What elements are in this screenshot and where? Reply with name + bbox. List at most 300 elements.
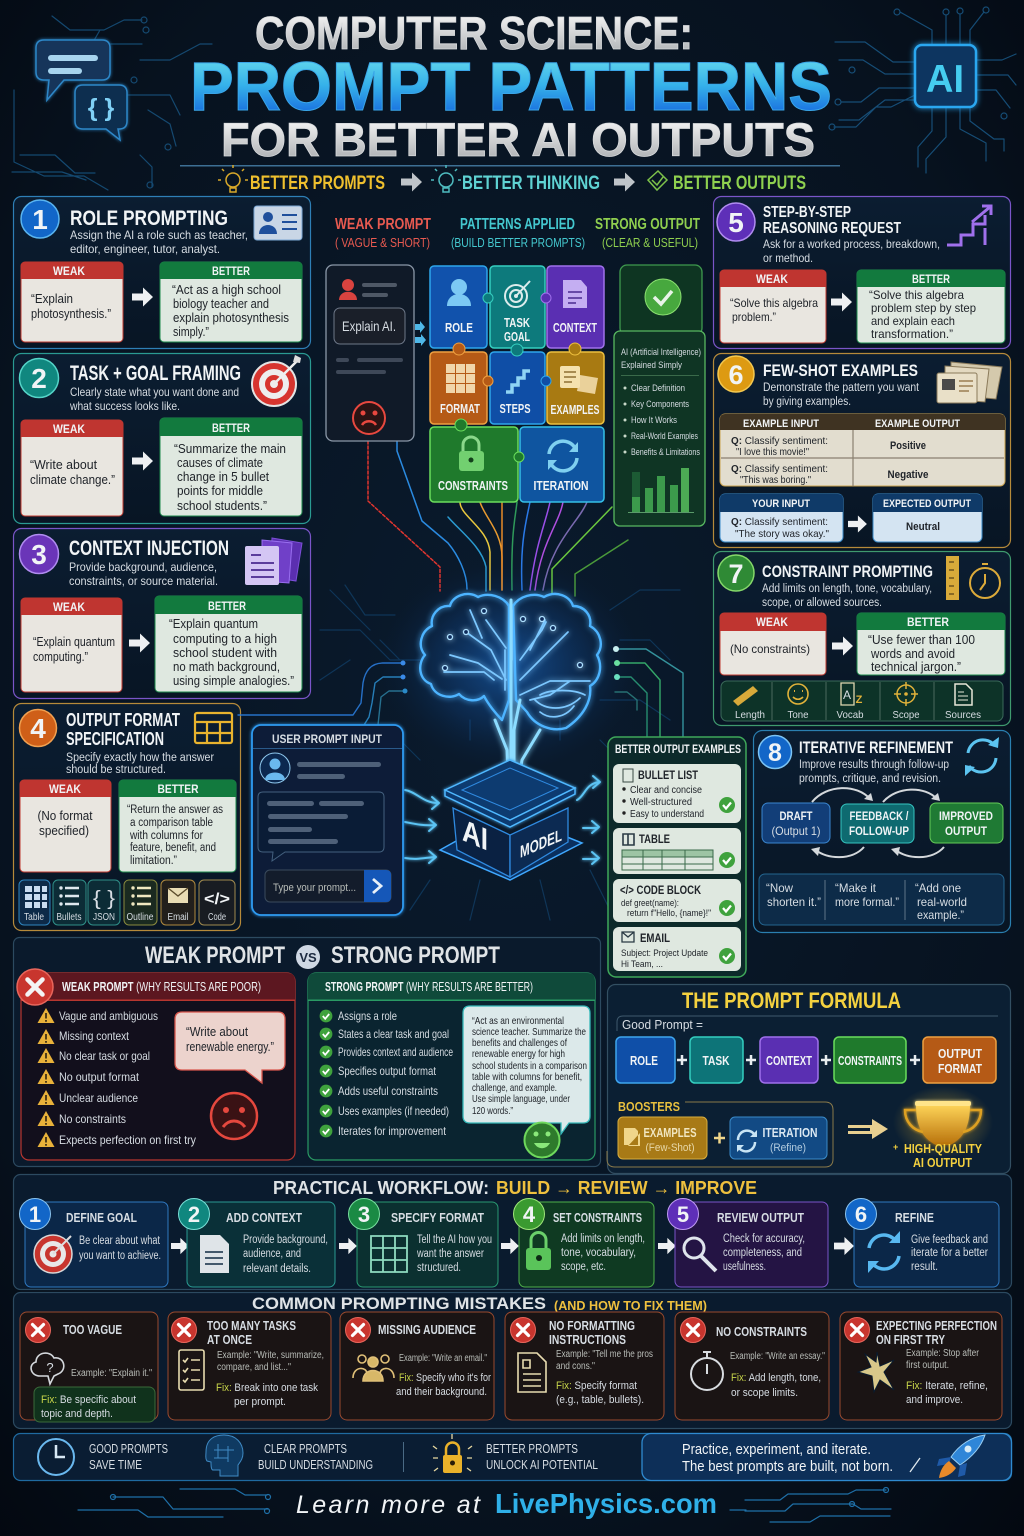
better example: simply.” <box>173 325 209 339</box>
step 4 <box>514 1198 654 1287</box>
wires from pattern blocks to brain <box>368 441 628 596</box>
booster: iteration: ITERATION <box>762 1126 818 1140</box>
mistake 5: Example: "Write an essay." <box>730 1351 825 1362</box>
weak example: specified) <box>39 823 89 838</box>
format tiles: Outline <box>126 912 154 923</box>
number badge 1 <box>21 200 59 238</box>
card: bullet list: Clear and concise <box>630 785 702 796</box>
icon: rocket <box>910 1435 985 1478</box>
icon: refresh <box>965 737 999 776</box>
strong reasons list <box>320 1009 453 1138</box>
block: constraints <box>430 419 518 502</box>
takeaway 1: GOOD PROMPTS <box>89 1442 168 1456</box>
tagline: better prompts to thinking to outputs: BETTER THINKING <box>462 173 600 194</box>
icon: user <box>260 753 290 783</box>
description: Demonstrate the pattern you want <box>763 382 920 394</box>
icon: smiling face <box>524 1122 560 1158</box>
card: email: Subject: Project Update <box>621 948 708 959</box>
icon: check document <box>648 171 667 190</box>
heading: STRONG PROMPT <box>331 942 500 969</box>
weak reasons list: Unclear audience <box>59 1091 138 1105</box>
block: task goal: GOAL <box>504 329 530 344</box>
step 3: structured. <box>417 1262 461 1274</box>
quote row: shorten it.” <box>767 895 821 909</box>
column headings: (BUILD BETTER PROMPTS) <box>451 235 585 250</box>
mistake 1: TOO VAGUE <box>63 1323 122 1337</box>
mistake 3 <box>340 1312 494 1420</box>
panel: the prompt formula <box>607 984 1010 1174</box>
practice callout <box>642 1434 1012 1480</box>
mistake 4 <box>505 1312 664 1420</box>
step 2: Provide background, <box>243 1234 328 1246</box>
block: iteration <box>514 427 604 502</box>
step 1: 1 <box>29 1202 41 1227</box>
weak example: “Explain <box>31 292 73 306</box>
icon: lock <box>433 1434 472 1473</box>
better example: points for middle <box>177 484 263 498</box>
better example <box>160 262 302 342</box>
step 2: audience, and <box>243 1248 301 1260</box>
your input: "The story was okay." <box>735 528 829 540</box>
step 4: tone, vocabulary, <box>561 1247 636 1259</box>
description <box>69 560 218 588</box>
booster: examples: EXAMPLES <box>644 1126 696 1140</box>
footer link: Learn more at <box>296 1491 481 1519</box>
constraint tiles <box>721 681 1003 721</box>
your input <box>720 494 843 542</box>
number badge 8 <box>758 736 792 768</box>
mistake 5: or scope limits. <box>731 1387 798 1399</box>
better example: causes of climate <box>177 456 263 470</box>
title: FOR BETTER AI OUTPUTS <box>221 113 815 166</box>
quote row: “Now <box>766 881 793 895</box>
step 5: usefulness. <box>723 1261 766 1273</box>
description <box>762 583 932 609</box>
brain and trunk <box>420 594 601 800</box>
number badge 2: 2 <box>31 363 47 394</box>
weak example <box>21 598 122 692</box>
strong reasons list: Iterates for improvement <box>338 1124 447 1138</box>
mistake 2 <box>168 1312 331 1420</box>
heading: THE PROMPT FORMULA <box>682 988 901 1013</box>
panel 7: constraint prompting <box>714 552 1010 726</box>
arrow <box>831 292 852 312</box>
better example <box>857 613 1005 675</box>
panel 5: step by step reasoning <box>714 196 1010 348</box>
icon: chat bubbles: { } <box>88 94 114 122</box>
card: code block <box>613 879 741 922</box>
heading: BUILD → REVIEW → IMPROVE <box>496 1178 757 1198</box>
strong reasons list: Specifies output format <box>338 1064 437 1078</box>
block: context <box>541 266 604 348</box>
bar chart <box>628 468 694 513</box>
arrow <box>132 452 153 470</box>
mistake 6: ON FIRST TRY <box>876 1333 946 1347</box>
step 2: ADD CONTEXT <box>226 1211 302 1225</box>
strong reasons list: Uses examples (if needed) <box>338 1104 449 1118</box>
footer takeaway bar <box>14 1434 1012 1480</box>
icon: sad face <box>353 402 385 434</box>
weak example <box>720 270 826 343</box>
strong prompt column <box>308 973 595 1160</box>
step 6: iterate for a better <box>911 1247 988 1259</box>
mistake 1: Example: "Explain it." <box>71 1368 152 1379</box>
step 6: 6 <box>855 1202 867 1227</box>
strong quote bubble: 120 words.” <box>472 1105 513 1117</box>
mistake 1 <box>20 1312 158 1422</box>
icon: trophy <box>905 1101 981 1145</box>
icon: rising stairs <box>947 206 991 245</box>
description <box>66 752 214 776</box>
better example: change in 5 bullet <box>177 470 269 484</box>
step 5: 5 <box>677 1202 689 1227</box>
strong output card <box>614 265 705 526</box>
weak example: climate change.” <box>30 473 115 487</box>
description <box>69 385 239 413</box>
number badge 8: 8 <box>768 739 782 767</box>
better example: “Use fewer than 100 <box>868 633 975 647</box>
better example: transformation.” <box>871 327 953 341</box>
description: Add limits on length, tone, vocabulary, <box>762 583 932 595</box>
better example: words and avoid <box>870 647 955 661</box>
card: code block: </> CODE BLOCK <box>620 885 702 897</box>
strong quote bubble: benefits and challenges of <box>472 1037 567 1049</box>
column heading: STRONG PROMPT (WHY RESULTS ARE BETTER) <box>325 979 533 994</box>
weak example: WEAK <box>53 600 85 614</box>
mistake 5: NO CONSTRAINTS <box>716 1325 807 1339</box>
takeaway 2: BUILD UNDERSTANDING <box>258 1458 373 1472</box>
weak example <box>720 613 826 675</box>
mistake 6: first output. <box>906 1360 949 1371</box>
better example: BETTER <box>158 782 199 796</box>
quote row <box>759 874 1004 925</box>
card: bullet list: Well-structured <box>630 797 692 808</box>
mistake 2: Fix: Break into one task <box>216 1382 318 1394</box>
weak reasons list: Missing context <box>59 1029 130 1043</box>
panel 1: role prompting <box>14 196 310 348</box>
prompt bubble <box>258 792 384 861</box>
column headings: PATTERNS APPLIED <box>460 216 575 233</box>
output text: Clear Definition <box>631 383 685 394</box>
heading <box>66 710 180 749</box>
strong quote bubble: “Act as an environmental <box>472 1015 564 1027</box>
expected output <box>873 494 982 542</box>
block: context: CONTEXT <box>553 320 597 335</box>
box: improved output: OUTPUT <box>945 824 988 838</box>
step 6: REFINE <box>895 1211 934 1225</box>
heading: ROLE PROMPTING <box>70 207 228 230</box>
output text <box>621 347 701 458</box>
heading: SPECIFICATION <box>66 729 164 749</box>
weak example <box>20 780 111 872</box>
icon: ruler <box>946 556 959 600</box>
step 6: result. <box>911 1261 938 1273</box>
description <box>763 382 920 408</box>
better example: problem step by step <box>871 301 976 315</box>
weak example: WEAK <box>756 272 788 286</box>
number badge 7: 7 <box>728 559 744 589</box>
quote row: more formal.” <box>835 895 899 909</box>
your input: Q: Classify sentiment: <box>731 516 828 528</box>
decorative circuits top left <box>12 16 212 190</box>
heading: ITERATIVE REFINEMENT <box>799 738 953 757</box>
output text: Explained Simply <box>621 360 682 371</box>
tagline: better prompts to thinking to outputs: BETTER PROMPTS <box>250 173 385 194</box>
number badge 6 <box>718 356 754 392</box>
column headings: WEAK PROMPT <box>335 216 431 233</box>
strong reasons list: Provides context and audience <box>338 1045 453 1059</box>
step 3: want the answer <box>416 1248 484 1260</box>
block: constraints: CONSTRAINTS <box>438 478 508 493</box>
box: feedback <box>841 804 914 843</box>
prompt input bar <box>265 870 391 902</box>
better example: BETTER <box>208 599 246 613</box>
better example <box>857 270 1005 343</box>
step 2: relevant details. <box>243 1263 311 1275</box>
better example <box>155 596 302 692</box>
chip label: AI: AI <box>462 812 488 858</box>
description: by giving examples. <box>763 396 851 408</box>
weak example <box>21 420 123 516</box>
mistake 4: (e.g., table, bullets). <box>556 1394 644 1406</box>
icon: brain head <box>206 1435 243 1476</box>
step 3 <box>348 1198 498 1287</box>
better example: school student with <box>173 646 277 660</box>
constraint tiles: A <box>843 688 851 702</box>
icon: lock <box>526 1233 551 1270</box>
icon: stopwatch <box>970 564 1000 598</box>
icon: clock <box>38 1439 74 1475</box>
example table: EXAMPLE OUTPUT <box>875 418 960 430</box>
booster: examples <box>618 1117 707 1159</box>
output text: Key Components <box>631 399 689 410</box>
better example: BETTER <box>907 615 949 629</box>
icon: question cloud <box>31 1353 64 1384</box>
formula blocks: OUTPUT <box>938 1046 982 1061</box>
number badge 3: 3 <box>31 539 47 570</box>
expected output: EXPECTED OUTPUT <box>883 498 971 510</box>
step 4: 4 <box>523 1202 536 1227</box>
example table <box>720 414 1005 486</box>
mistake 4: and cons." <box>556 1361 595 1372</box>
wires around brain to panels <box>238 646 683 737</box>
card: bullet list: Easy to understand <box>630 809 704 820</box>
card: email: Hi Team, ... <box>621 959 663 970</box>
panel heading: USER PROMPT INPUT <box>272 734 382 746</box>
icon: stopwatch <box>691 1352 723 1390</box>
loop arrows <box>811 788 944 857</box>
constraint tiles: Vocab <box>836 709 864 721</box>
output text: AI (Artificial Intelligence) <box>621 347 701 358</box>
step 1: DEFINE GOAL <box>66 1211 137 1225</box>
number badge 2 <box>20 358 58 398</box>
strong reasons list: Adds useful constraints <box>338 1084 438 1098</box>
column headings: ( VAGUE & SHORT) <box>335 235 430 250</box>
weak reasons list: Vague and ambiguous <box>59 1009 158 1023</box>
description: scope, or allowed sources. <box>762 597 882 609</box>
heading: WEAK PROMPT <box>145 942 285 969</box>
label: good prompt: Good Prompt = <box>622 1017 703 1032</box>
strong quote bubble: science teacher. Summarize the <box>472 1026 586 1038</box>
weak prompt column <box>17 969 295 1160</box>
better example: technical jargon.” <box>871 660 961 674</box>
step 5 <box>668 1198 828 1287</box>
weak example: “Solve this algebra <box>730 296 818 310</box>
block: iteration: ITERATION <box>534 478 588 493</box>
practice callout: The best prompts are built, not born. <box>682 1459 893 1475</box>
takeaway 2 <box>258 1442 373 1472</box>
icon: id card <box>254 206 302 240</box>
panel heading: BETTER OUTPUT EXAMPLES <box>615 744 741 756</box>
booster: iteration: (Refine) <box>770 1142 806 1154</box>
icon: target <box>252 355 301 406</box>
heading: FEW-SHOT EXAMPLES <box>763 361 918 380</box>
heading: TASK + GOAL FRAMING <box>70 362 241 385</box>
number badge 1: 1 <box>32 204 48 235</box>
block: steps: STEPS <box>500 401 531 416</box>
format tiles: </> <box>204 891 230 908</box>
tagline: better prompts to thinking to outputs: BETTER OUTPUTS <box>673 173 806 194</box>
number badge 3 <box>20 534 58 574</box>
strong quote bubble: Use simple language, under <box>472 1093 570 1105</box>
strong reasons list: States a clear task and goal <box>338 1027 449 1041</box>
arrow <box>132 288 153 306</box>
arrows into and out of AI model <box>405 776 600 864</box>
takeaway 3 <box>486 1442 598 1472</box>
footer circuit decoration <box>78 1488 891 1522</box>
description: Improve results through follow-up <box>799 759 949 771</box>
heading: PRACTICAL WORKFLOW: <box>273 1178 489 1198</box>
example table: "I love this movie!" <box>736 446 809 458</box>
heading: COMMON PROMPTING MISTAKES <box>252 1295 546 1313</box>
weak reasons list: No output format <box>59 1070 140 1084</box>
better example: school students.” <box>177 499 267 513</box>
fix box: topic and depth. <box>41 1408 113 1420</box>
column headings: (CLEAR & USEFUL) <box>602 235 698 250</box>
block: task goal <box>483 266 545 348</box>
number badge 5: 5 <box>728 207 744 238</box>
format tiles: Code <box>208 912 226 923</box>
better output examples panel <box>608 737 746 977</box>
step 3: SPECIFY FORMAT <box>391 1211 484 1225</box>
heading: CONSTRAINT PROMPTING <box>762 562 933 581</box>
mistake 4: NO FORMATTING <box>549 1319 635 1333</box>
better example: biology teacher and <box>173 297 269 311</box>
trophy glow <box>893 1086 993 1158</box>
card: table: TABLE <box>639 834 670 846</box>
weak reasons list: Expects perfection on first try <box>59 1133 196 1147</box>
panel: weak vs strong prompt <box>14 938 600 1166</box>
box: draft: (Output 1) <box>772 824 820 838</box>
formula blocks: CONTEXT <box>766 1053 812 1068</box>
fix box <box>34 1387 155 1422</box>
box: draft: DRAFT <box>780 809 813 823</box>
icon: user red <box>339 279 357 300</box>
mistake 5 <box>675 1312 829 1420</box>
icon: table <box>371 1236 407 1272</box>
step 4: SET CONSTRAINTS <box>553 1211 642 1225</box>
prompt box: Explain AI. <box>342 318 396 334</box>
step 6: Give feedback and <box>911 1234 988 1246</box>
icon: document <box>518 1353 546 1392</box>
takeaway 3: BETTER PROMPTS <box>486 1442 578 1456</box>
column headings: STRONG OUTPUT <box>595 216 700 233</box>
weak example: (No format <box>38 808 93 823</box>
mistake 2: Example: "Write, summarize, <box>217 1350 324 1361</box>
mistake 6 <box>840 1312 1002 1420</box>
description <box>70 228 248 256</box>
icon: x badge <box>17 969 53 1005</box>
description: should be structured. <box>66 764 166 776</box>
panel 2: task and goal framing <box>14 354 310 524</box>
boosters: BOOSTERS <box>618 1100 680 1114</box>
user prompt input panel <box>252 725 403 915</box>
icon: table <box>195 713 232 743</box>
constraint tiles: Sources <box>945 709 981 721</box>
mistake 3: Example: "Write an email." <box>399 1353 487 1364</box>
number badge 4 <box>20 710 56 746</box>
mistake 6: and improve. <box>906 1394 963 1406</box>
constraint tiles: Scope <box>892 709 920 721</box>
tagline: better prompts to thinking to outputs <box>218 165 806 194</box>
description: Clearly state what you want done and <box>70 385 239 399</box>
box: improved output: IMPROVED <box>939 809 993 823</box>
better example: limitation.” <box>130 855 177 867</box>
your input: YOUR INPUT <box>752 498 810 510</box>
block: steps <box>483 344 545 424</box>
constraint tiles: Length <box>735 709 765 721</box>
description <box>763 237 940 265</box>
panel: practical workflow <box>14 1174 1012 1290</box>
description: or method. <box>763 251 813 265</box>
strong quote bubble: table with columns for benefit, <box>472 1071 582 1083</box>
prompt box <box>334 308 405 344</box>
pattern puzzle blocks <box>430 266 604 502</box>
expected output: Neutral <box>906 521 940 533</box>
step 5: REVIEW OUTPUT <box>717 1211 804 1225</box>
icon: document <box>200 1235 229 1273</box>
prompt input bar: Type your prompt... <box>273 882 356 894</box>
description: Ask for a worked process, breakdown, <box>763 237 940 251</box>
trophy caption: HIGH-QUALITY <box>904 1141 982 1156</box>
better example <box>160 418 302 516</box>
better example: explain photosynthesis <box>173 311 289 325</box>
step 5: Check for accuracy, <box>723 1233 805 1245</box>
step 4: Add limits on length, <box>561 1233 645 1245</box>
format tiles: JSON <box>93 912 115 923</box>
block: format <box>430 343 487 424</box>
mistake 2: compare, and list..." <box>217 1362 291 1373</box>
takeaway 1 <box>89 1442 168 1472</box>
better example: “Solve this algebra <box>869 288 964 302</box>
icon: AI chip: AI <box>926 58 964 101</box>
heading: VS <box>299 950 317 965</box>
strong reasons list: Assigns a role <box>338 1009 397 1023</box>
weak reasons list <box>38 1008 196 1147</box>
mistake 2: TOO MANY TASKS <box>207 1319 296 1333</box>
fix box: Fix: Be specific about <box>41 1394 136 1406</box>
box: draft <box>762 803 830 843</box>
heading <box>273 1178 757 1198</box>
output text: Benefits & Limitations <box>631 447 700 458</box>
heading <box>763 204 901 237</box>
example table: "This was boring." <box>740 474 811 486</box>
better example: BETTER <box>212 421 250 435</box>
strong quote bubble: school students in a comparison <box>472 1060 587 1072</box>
arrow <box>129 634 150 652</box>
better example: “Act as a high school <box>172 283 281 297</box>
example table: Q: Classify sentiment: <box>731 463 828 475</box>
